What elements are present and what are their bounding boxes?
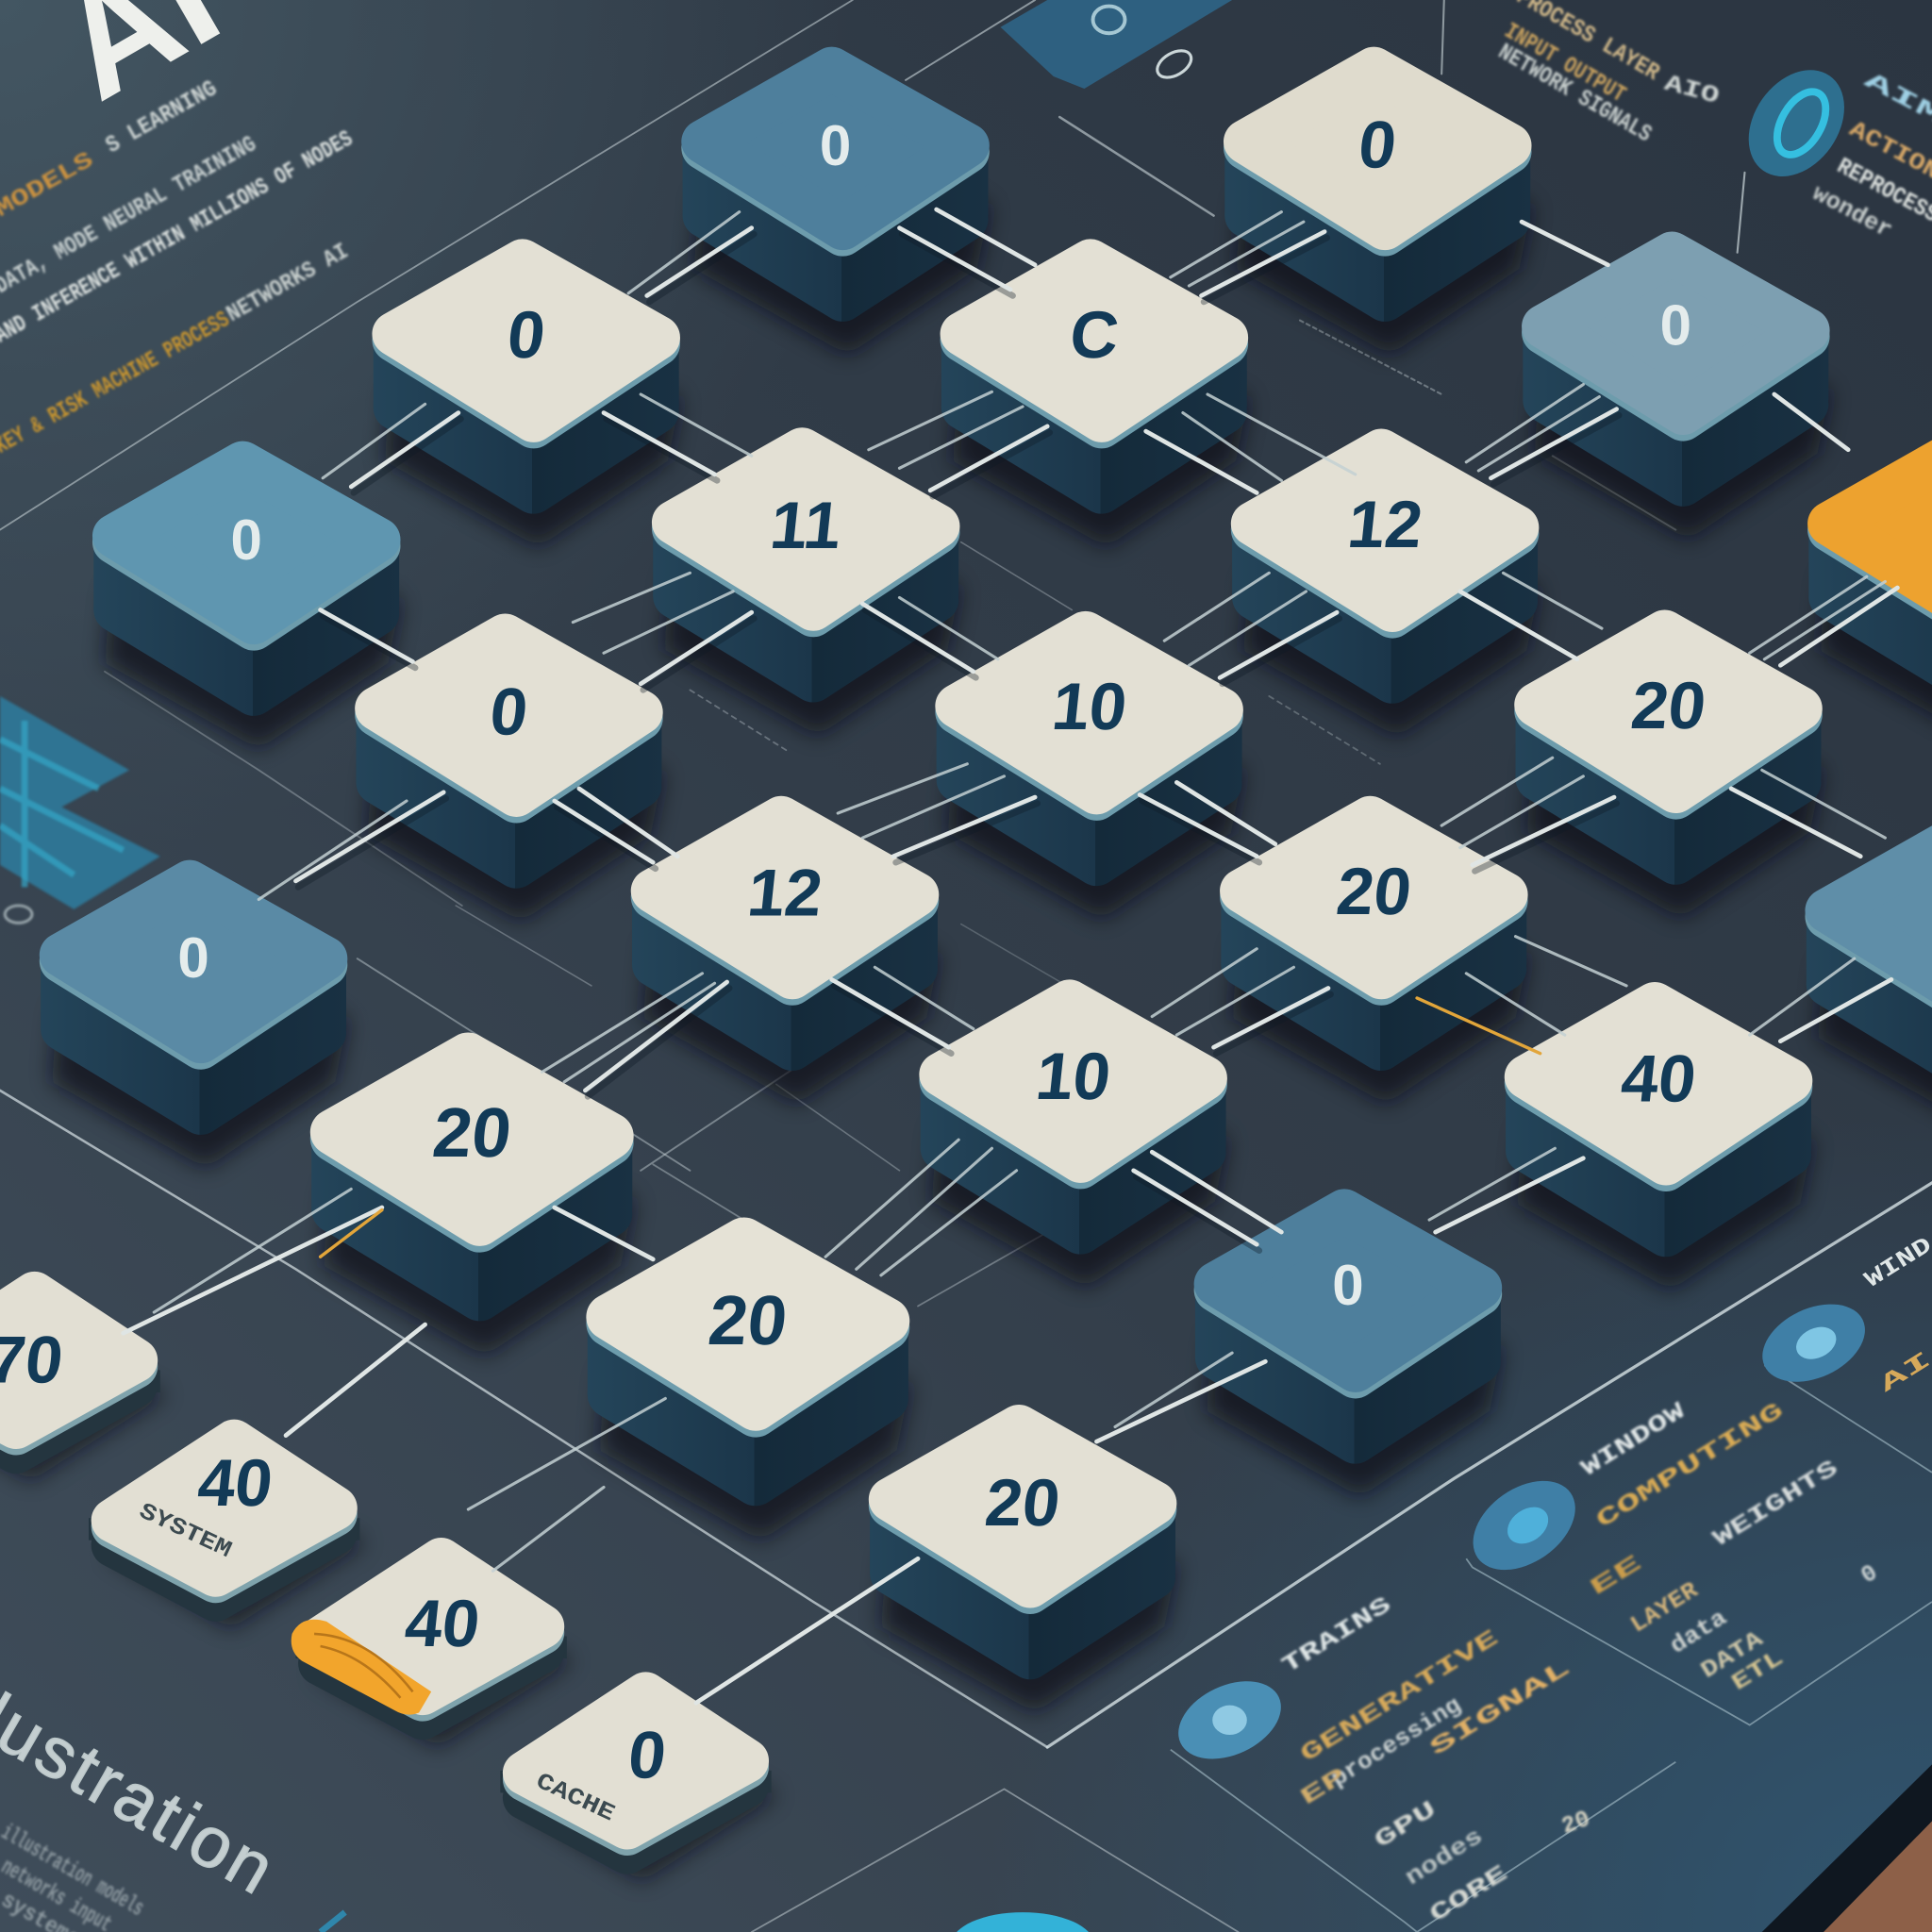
top-left description text lines: NETWORKS AI (223, 239, 354, 328)
block: cream 10 lower (921, 1002, 1227, 1288)
top-right text block: INPUT OUTPUT (1499, 18, 1630, 108)
panel: lower info card: SIGNAL (1425, 1655, 1575, 1762)
block: blue 0 top: 0 (820, 114, 851, 177)
top-right text block: NETWORK SIGNALS (1493, 39, 1656, 148)
block: cream 20 center right: 20 (1333, 854, 1415, 928)
block: grey-blue top right (1523, 254, 1830, 540)
block: blue 0 left (93, 463, 400, 749)
block: cream 20 center (588, 1241, 909, 1541)
block: grey-blue top right: 0 (1660, 294, 1691, 358)
small block: 40 with caption: 40 (194, 1445, 276, 1520)
top center blue info tab (1001, 0, 1232, 89)
block: cream 20 center right (1221, 818, 1528, 1104)
panel: right info card: WIND (1860, 1232, 1932, 1294)
block: cream 40: 40 (1618, 1041, 1700, 1116)
small block: 40 with orange patch (291, 1560, 573, 1747)
small block: 40 with caption (89, 1441, 366, 1629)
block: blue 0 far left (41, 882, 347, 1168)
block: cream 0 mid left: 0 (487, 675, 531, 748)
top-left description text lines: KEY & RISK MACHINE PROCESS (0, 307, 234, 460)
block: cream 20 bottom (870, 1426, 1176, 1713)
top-right cyan icon and list: AIM (1859, 67, 1932, 131)
panel: middle info card: WEIGHTS (1708, 1456, 1843, 1553)
panel: middle info card: 0 (1857, 1560, 1883, 1590)
block: blue at right edge (1807, 838, 1932, 1124)
block: cream 20 bottom: 20 (982, 1465, 1064, 1540)
block: cream 0 top right: 0 (1356, 108, 1400, 182)
block: cream 12 upper (1232, 451, 1539, 737)
block: cream C: C (1067, 297, 1123, 372)
panel: lower info card: nodes (1401, 1824, 1488, 1891)
top-left description text lines: DATA, MODE NEURAL TRAINING (0, 131, 261, 300)
block: cream 12 (632, 818, 939, 1104)
small block: 70 left edge (0, 1293, 166, 1481)
block: cream 10 mid (937, 633, 1243, 919)
top-right cyan icon and list (1729, 52, 1932, 244)
block: cream 10 mid: 10 (1049, 669, 1130, 743)
block: cream 12: 12 (744, 856, 826, 929)
panel: lower info card: 20 (1558, 1807, 1593, 1840)
block: cream 12 upper: 12 (1344, 487, 1426, 561)
small block: 0 with caption: CACHE (531, 1768, 619, 1827)
top-left description text lines: S LEARNING (102, 75, 222, 159)
panel: lower info card: EP (1296, 1763, 1352, 1811)
panel: middle info card: DATA (1696, 1626, 1768, 1685)
panel: middle info card (1457, 1398, 1932, 1725)
block: cream 0 mid left (356, 636, 663, 922)
top-left description text lines (0, 75, 358, 460)
small block: 0 with caption (500, 1694, 777, 1881)
panel: right info card: AI (1875, 1347, 1932, 1399)
top-right cyan icon and list: wonder (1807, 180, 1896, 244)
panel: lower info card (1166, 1591, 1675, 1932)
block: cream 20 right: 20 (1627, 668, 1709, 742)
panel: middle info card: data (1666, 1605, 1732, 1660)
panel: lower info card: processing (1327, 1692, 1466, 1793)
block: cream 11: 11 (767, 488, 845, 562)
block: cream 0 top right (1224, 69, 1532, 355)
connector wires between blocks (124, 209, 1897, 1703)
block: blue 0 far left: 0 (177, 926, 209, 990)
panel: right info card (1750, 1232, 1932, 1473)
block: cream 20 left (311, 1056, 634, 1356)
block: orange at right edge (1808, 451, 1932, 737)
block: cream 11 (653, 450, 959, 736)
small block: 40 with orange patch: 40 (402, 1586, 483, 1660)
block: cream C (941, 261, 1248, 547)
block: cream 0: 0 (504, 297, 549, 372)
block: blue 0 left: 0 (231, 508, 262, 572)
panel: lower info card: GENERATIVE (1296, 1625, 1504, 1769)
panel: middle info card: EE (1586, 1550, 1647, 1602)
block: blue 0 lower right: 0 (1332, 1254, 1364, 1317)
block: cream 0 (374, 261, 680, 547)
panel: lower info card: TRAINS (1277, 1591, 1396, 1679)
panel: middle info card: LAYER (1626, 1577, 1703, 1639)
panel: middle info card: ETL (1727, 1645, 1789, 1697)
panel: lower info card: CORE (1425, 1860, 1512, 1928)
block: cream 20 center: 20 (705, 1281, 791, 1359)
small block: 0 with caption: 0 (625, 1718, 670, 1792)
bottom-left small text (0, 1820, 148, 1932)
top-right text block: AIO (1661, 71, 1722, 110)
block: blue 0 top (683, 69, 990, 355)
block: cream 20 right (1516, 632, 1823, 918)
panel: middle info card: WINDOW (1577, 1398, 1690, 1483)
left cyan chart tab (0, 696, 160, 923)
bottom cyan icon (321, 1912, 1094, 1932)
block: cream 40 (1506, 1004, 1812, 1291)
top-right cyan icon and list: ACTION (1844, 116, 1932, 186)
top-left description text lines: AND INFERENCE WITHIN MILLIONS OF NODES (0, 125, 358, 349)
panel: lower info card: GPU (1370, 1796, 1441, 1855)
block: cream 10 lower: 10 (1032, 1039, 1114, 1113)
small block: 40 with caption: SYSTEM (135, 1498, 235, 1564)
table corner at bottom right (1762, 1764, 1932, 1932)
panel: middle info card: COMPUTING (1591, 1398, 1789, 1534)
block: blue 0 lower right (1195, 1211, 1502, 1497)
top-right text block (1493, 0, 1722, 148)
block: cream 20 left: 20 (429, 1093, 515, 1172)
